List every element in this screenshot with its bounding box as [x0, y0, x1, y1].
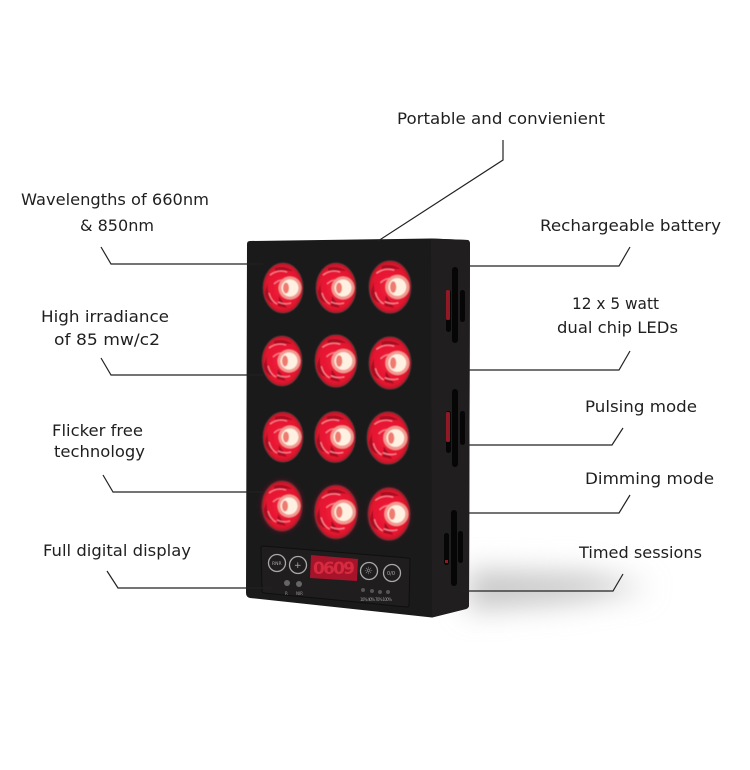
callout: digital display: [43, 541, 272, 588]
LED array: [262, 261, 411, 540]
button glyphs: 0/0: [387, 571, 395, 577]
callout: pulsing: Pulsing mode: [585, 397, 697, 416]
button glyphs: +: [294, 561, 302, 571]
callout: portable: Portable and convienient: [397, 109, 605, 128]
R and NIR indicators: R: [285, 591, 288, 596]
control panel: [261, 546, 410, 607]
callout: wavelengths: [21, 190, 263, 264]
dimming level indicators: 10% 40% 70% 100%: [360, 597, 392, 602]
callout: irradiance: [41, 307, 263, 375]
device: [21, 109, 721, 618]
R and NIR indicators: NIR: [296, 591, 303, 596]
callout: flicker free: technology: [54, 442, 145, 461]
callout: wavelengths: & 850nm: [80, 216, 154, 235]
callout: dimming: Dimming mode: [585, 469, 714, 488]
callout: digital display: Full digital display: [43, 541, 191, 560]
callout: battery: [468, 216, 721, 266]
callout: LEDs: 12 x 5 watt: [572, 294, 659, 313]
device body: [246, 238, 470, 618]
button glyphs: RNR: [272, 561, 282, 567]
LED digital display: [310, 555, 358, 581]
dimming level indicators: [360, 588, 392, 602]
R and NIR indicators: [284, 580, 303, 596]
callout: timed sessions: Timed sessions: [578, 543, 702, 562]
callout: flicker free: [52, 421, 263, 492]
floor shadow: [468, 570, 650, 610]
panel plate: [261, 546, 410, 607]
side red indicators: [445, 290, 450, 563]
callout: dimming: [467, 469, 714, 513]
callout: flicker free: Flicker free: [52, 421, 143, 440]
button glyphs: [272, 561, 395, 577]
callout: LEDs: [462, 294, 678, 370]
button glyphs: ☼: [364, 566, 373, 577]
LED glow: [261, 480, 410, 540]
callout: portable: [378, 109, 605, 241]
callout: timed sessions: [462, 543, 702, 591]
side face: [431, 238, 470, 618]
callout: wavelengths: Wavelengths of 660nm: [21, 190, 209, 209]
callout: irradiance: High irradiance: [41, 307, 169, 326]
callout: irradiance: of 85 mw/c2: [54, 330, 160, 349]
LED digital display: 0609: [313, 559, 355, 579]
callout: battery: Rechargeable battery: [540, 216, 721, 235]
side vents: [444, 267, 465, 586]
callout: LEDs: dual chip LEDs: [557, 318, 678, 337]
callout: pulsing: [465, 397, 697, 445]
buttons: [268, 554, 400, 582]
